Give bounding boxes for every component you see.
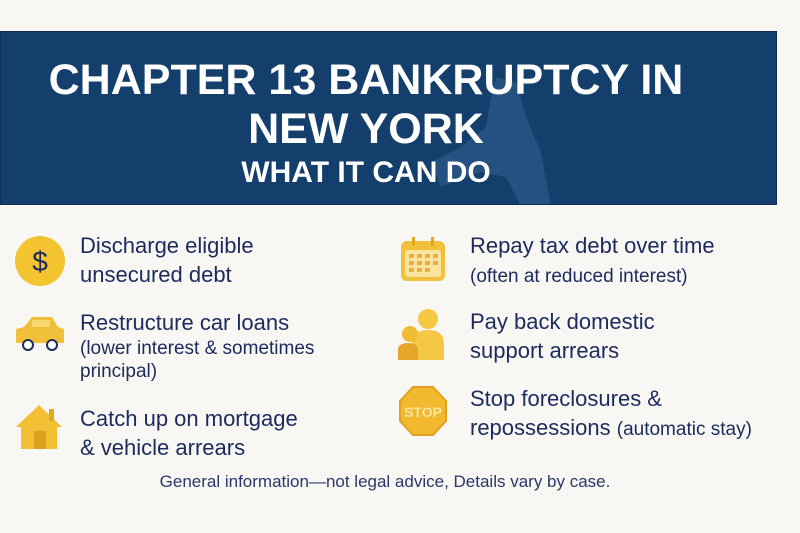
icon: calendar: [401, 237, 445, 281]
item: car loans: principal): [80, 361, 157, 382]
item: domestic support: support arrears: [470, 338, 619, 363]
icon: house: [16, 405, 62, 449]
item: stop foreclosures: (automatic stay): [617, 419, 752, 440]
item: mortgage: [80, 406, 298, 460]
banner: [0, 31, 777, 205]
item: tax: Repay tax debt over time: [470, 233, 715, 258]
map silhouette: [431, 77, 550, 204]
item: stop foreclosures: Stop foreclosures &: [470, 386, 662, 411]
icon: dollar coin: [15, 236, 65, 286]
item: stop foreclosures: repossessions: [470, 415, 611, 440]
item: mortgage: Catch up on mortgage: [80, 406, 298, 431]
icon: dollar coin: $: [32, 246, 48, 277]
item: tax: [470, 233, 715, 287]
item: car loans: (lower interest & sometimes: [80, 338, 314, 359]
item: discharge: Discharge eligible: [80, 233, 254, 258]
footer disclaimer: General information—not legal advice, Details vary by case.: [160, 472, 610, 491]
icon: car: [16, 317, 64, 351]
title: CHAPTER 13 BANKRUPTCY IN: [49, 56, 683, 104]
subtitle: WHAT IT CAN DO: [241, 156, 491, 189]
item: mortgage: & vehicle arrears: [80, 435, 245, 460]
icon: people: [398, 309, 444, 360]
item: tax: (often at reduced interest): [470, 266, 688, 287]
title: [49, 56, 683, 153]
item: discharge: unsecured debt: [80, 262, 232, 287]
item: discharge: [80, 233, 254, 287]
icon: stop sign: STOP: [404, 404, 442, 420]
item: car loans: [80, 310, 314, 382]
item: stop foreclosures: [470, 386, 752, 440]
item: car loans: Restructure car loans: [80, 310, 289, 335]
item: domestic support: [470, 309, 655, 363]
title: NEW YORK: [248, 105, 484, 153]
icon: stop sign: [399, 386, 447, 436]
item: domestic support: Pay back domestic: [470, 309, 655, 334]
